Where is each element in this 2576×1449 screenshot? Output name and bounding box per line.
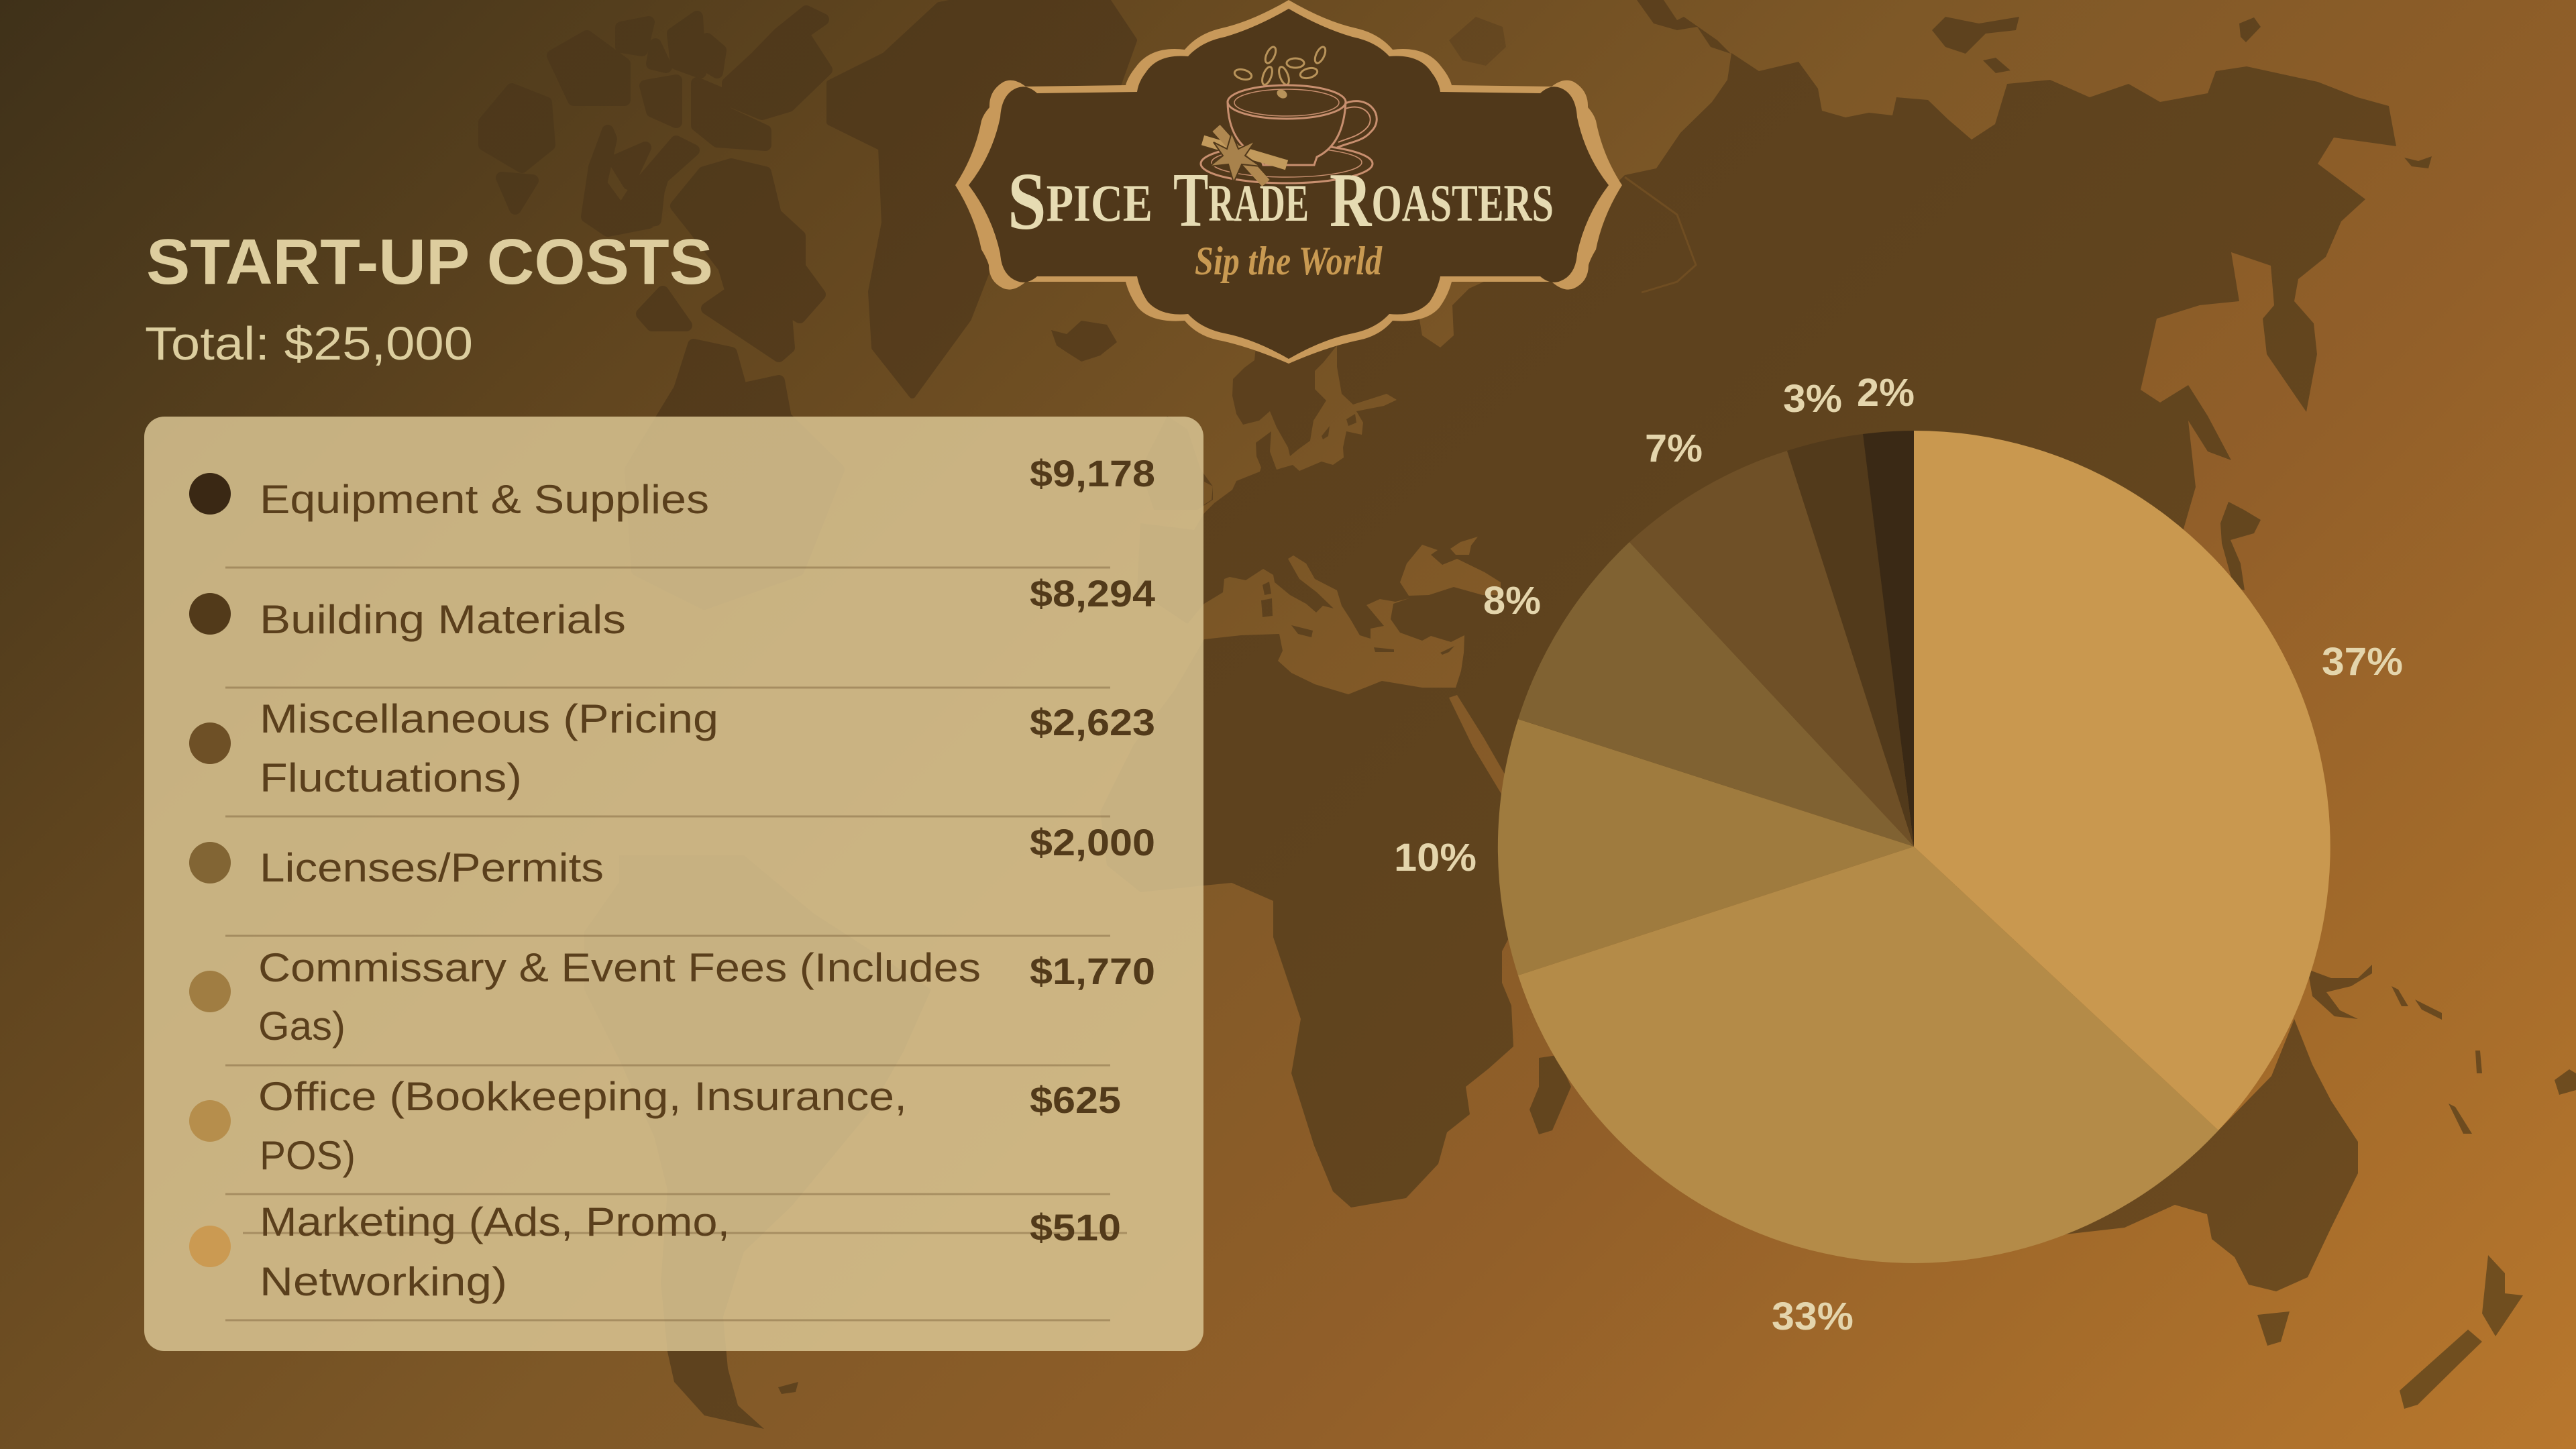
slice: 7 percent bbox=[1629, 451, 1914, 847]
row: miscellaneous: Miscellaneous (Pricing bbox=[260, 696, 718, 741]
row: commissary and event fees: Commissary & Event Fees (Includes bbox=[258, 945, 981, 990]
panel: cost list bbox=[144, 417, 1203, 1351]
row: office bbox=[189, 1074, 1121, 1178]
icon: cinnamon sticks and star anise bbox=[1203, 128, 1287, 183]
row: building materials: Building Materials bbox=[260, 597, 626, 642]
icon: falling spice leaves bbox=[1234, 46, 1328, 86]
map: northern inlet bbox=[1625, 177, 1696, 292]
pie percentage labels: 3% bbox=[1783, 377, 1842, 421]
row: miscellaneous: Fluctuations) bbox=[260, 755, 522, 800]
pie chart bbox=[1498, 431, 2330, 1263]
pie percentage labels: 10% bbox=[1394, 836, 1477, 879]
slice: 3 percent bbox=[1787, 434, 1914, 847]
row: miscellaneous: $2,623 bbox=[1030, 701, 1155, 743]
map: Australia and Tasmania bbox=[2065, 1019, 2358, 1346]
map: North American islands and mainland bbox=[484, 11, 839, 604]
map: Mediterranean and Baltic islands bbox=[1140, 414, 1454, 655]
logo: brand name: S bbox=[1008, 156, 1046, 247]
logo: brand name: OASTERS bbox=[1371, 174, 1554, 232]
row: licenses and permits: Licenses/Permits bbox=[260, 845, 604, 890]
row: office: $625 bbox=[1030, 1079, 1121, 1121]
row: commissary and event fees: $1,770 bbox=[1030, 950, 1155, 992]
logo badge bbox=[955, 0, 1622, 364]
map: Madagascar bbox=[1529, 1055, 1571, 1134]
slice: 8 percent bbox=[1518, 542, 1914, 847]
logo: brand name bbox=[1008, 156, 1554, 247]
row: commissary and event fees bbox=[189, 945, 1155, 1049]
map: speckled Svalbard cluster bbox=[1449, 17, 1506, 66]
icon: teacup with saucer bbox=[1201, 85, 1377, 183]
panel background bbox=[144, 417, 1203, 1351]
pie percentage labels: 33% bbox=[1772, 1295, 1854, 1338]
row: equipment and supplies: $9,178 bbox=[1030, 452, 1155, 494]
map: South America bbox=[584, 855, 931, 1429]
row: office: POS) bbox=[260, 1133, 356, 1178]
logo: dark plate bbox=[969, 9, 1609, 359]
logo: brand name: PICE bbox=[1046, 174, 1152, 232]
logo: brand name: R bbox=[1330, 158, 1372, 244]
slice: 10 percent bbox=[1498, 719, 1914, 975]
map: Greenland bbox=[830, 0, 1134, 395]
row: marketing: Networking) bbox=[260, 1259, 507, 1304]
text: total: Total: $25,000 bbox=[145, 317, 473, 370]
slice: 33 percent bbox=[1518, 847, 2218, 1263]
heading: start-up costs: START-UP COSTS bbox=[146, 226, 713, 298]
slice: 2 percent bbox=[1863, 431, 1914, 847]
row: licenses and permits bbox=[189, 821, 1155, 890]
row: building materials bbox=[189, 572, 1155, 642]
logo: gold frame bbox=[955, 0, 1622, 364]
pie percentage labels: 37% bbox=[2322, 640, 2403, 684]
map: Iceland bbox=[1051, 321, 1117, 362]
map: Japan bbox=[2220, 502, 2261, 590]
map: New Zealand bbox=[2400, 1255, 2523, 1409]
slice: 37 percent bbox=[1914, 431, 2330, 1130]
row: marketing: $510 bbox=[1030, 1206, 1121, 1248]
pie percentage labels: 2% bbox=[1857, 371, 1915, 415]
pie percentage labels: 7% bbox=[1645, 427, 1703, 470]
row: equipment and supplies bbox=[189, 452, 1155, 522]
row: office: Office (Bookkeeping, Insurance, bbox=[258, 1074, 907, 1119]
logo: brand name: RADE bbox=[1208, 174, 1309, 232]
pie percentage labels bbox=[1394, 371, 2403, 1338]
row: building materials: $8,294 bbox=[1030, 572, 1155, 614]
row: miscellaneous bbox=[189, 696, 1155, 800]
logo: brand name: T bbox=[1173, 158, 1208, 244]
row: marketing: Marketing (Ads, Promo, bbox=[260, 1199, 730, 1244]
map: Eurasia and Africa bbox=[1100, 53, 2396, 1208]
row: equipment and supplies: Equipment & Supplies bbox=[260, 477, 709, 522]
row: commissary and event fees: Gas) bbox=[258, 1004, 345, 1049]
row: marketing bbox=[189, 1199, 1121, 1304]
map: New Guinea and Pacific islands bbox=[2308, 965, 2576, 1134]
row: licenses and permits: $2,000 bbox=[1030, 821, 1155, 863]
logo: tagline: Sip the World bbox=[1195, 239, 1383, 283]
pie percentage labels: 8% bbox=[1483, 579, 1541, 623]
map: Arctic islands bbox=[1637, 0, 2432, 168]
